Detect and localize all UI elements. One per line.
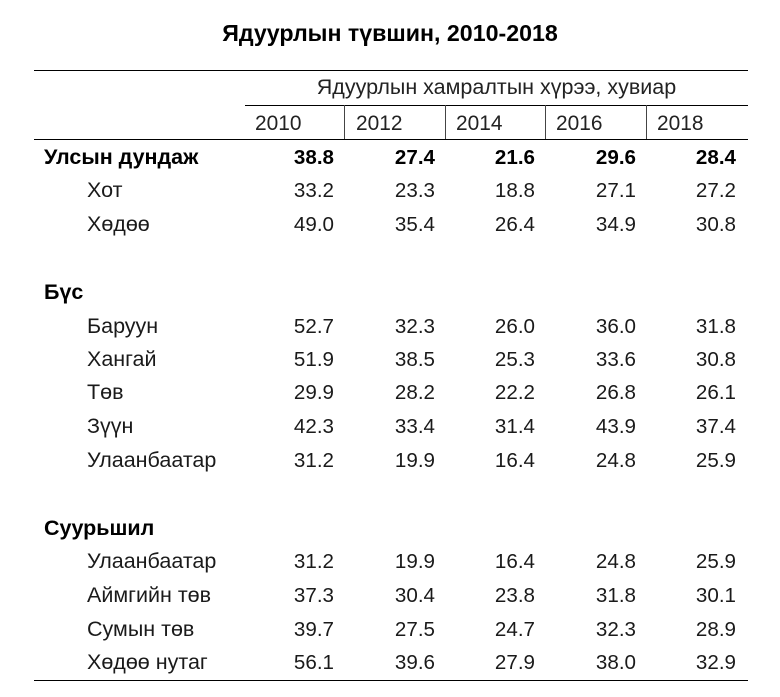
row: urban: 27.1 xyxy=(596,179,636,202)
row: aimag centre: 23.8 xyxy=(495,584,535,607)
row: west: Баруун xyxy=(87,314,158,338)
row: ulaanbaatar (region): 19.9 xyxy=(395,449,435,472)
row: urban: 23.3 xyxy=(395,179,435,202)
section heading: settlement: Суурьшил xyxy=(44,516,154,540)
row: countryside: 27.9 xyxy=(495,651,535,674)
row: national average: 28.4 xyxy=(696,146,737,169)
row: soum centre: 32.3 xyxy=(596,618,636,641)
row: khangai: 51.9 xyxy=(294,348,334,371)
row: urban: 27.2 xyxy=(696,179,736,202)
row: soum centre: 24.7 xyxy=(495,618,535,641)
row: ulaanbaatar (region): 31.2 xyxy=(294,449,334,472)
row: aimag centre: 30.1 xyxy=(696,584,736,607)
row: countryside: Хөдөө нутаг xyxy=(87,650,208,674)
row: east xyxy=(87,414,736,438)
row: rural: 30.8 xyxy=(696,213,736,236)
row: national average: 27.4 xyxy=(395,146,436,169)
row: countryside: 32.9 xyxy=(696,651,736,674)
section heading: region: Бүс xyxy=(44,280,83,304)
row: countryside xyxy=(87,650,736,674)
row: soum centre: 39.7 xyxy=(294,618,334,641)
year headers: 2012 xyxy=(356,112,402,135)
row: rural: 34.9 xyxy=(596,213,636,236)
row: aimag centre: 37.3 xyxy=(294,584,334,607)
row: soum centre: 27.5 xyxy=(395,618,435,641)
row: aimag centre: Аймгийн төв xyxy=(87,583,211,607)
row: west: 31.8 xyxy=(696,315,736,338)
row: aimag centre: 30.4 xyxy=(395,584,435,607)
title: Ядуурлын түвшин, 2010-2018 xyxy=(222,20,558,46)
row: national average: 21.6 xyxy=(495,146,535,169)
row: ulaanbaatar (region): Улаанбаатар xyxy=(87,448,216,472)
row: urban: 18.8 xyxy=(495,179,535,202)
row: east: 37.4 xyxy=(696,415,736,438)
row: rural: 49.0 xyxy=(294,213,334,236)
row: ulaanbaatar (region): 25.9 xyxy=(696,449,736,472)
row: national average: Улсын дундаж xyxy=(44,145,199,169)
row: soum centre xyxy=(87,617,736,641)
row: west: 36.0 xyxy=(596,315,636,338)
row: rural: Хөдөө xyxy=(87,212,150,236)
row: central: 26.8 xyxy=(596,381,636,404)
row: central xyxy=(87,380,736,404)
row: ulaanbaatar (settlement) xyxy=(87,549,736,573)
row: east: 43.9 xyxy=(596,415,636,438)
row: ulaanbaatar (settlement): 16.4 xyxy=(495,550,535,573)
row: countryside: 56.1 xyxy=(294,651,334,674)
row: urban: 33.2 xyxy=(294,179,334,202)
row: ulaanbaatar (region): 24.8 xyxy=(596,449,636,472)
row: west: 32.3 xyxy=(395,315,435,338)
row: ulaanbaatar (settlement): Улаанбаатар xyxy=(87,549,216,573)
row: khangai: 33.6 xyxy=(596,348,636,371)
row: urban xyxy=(87,178,736,202)
row: national average: 38.8 xyxy=(294,146,334,169)
row: ulaanbaatar (region): 16.4 xyxy=(495,449,535,472)
row: ulaanbaatar (settlement): 24.8 xyxy=(596,550,636,573)
row: ulaanbaatar (settlement): 31.2 xyxy=(294,550,334,573)
row: west xyxy=(87,314,736,338)
column heading: poverty headcount, percent: Ядуурлын хамралтын хүрээ, хувиар xyxy=(317,75,676,99)
row: rural xyxy=(87,212,736,236)
row: central: 22.2 xyxy=(495,381,535,404)
row: countryside: 38.0 xyxy=(596,651,636,674)
year headers: 2018 xyxy=(657,112,703,135)
row: central: Төв xyxy=(87,380,124,404)
row: central: 26.1 xyxy=(696,381,736,404)
row: central: 29.9 xyxy=(294,381,334,404)
row: ulaanbaatar (region) xyxy=(87,448,736,472)
row: soum centre: Сумын төв xyxy=(87,617,194,641)
row: khangai: 30.8 xyxy=(696,348,736,371)
row: national average xyxy=(44,145,737,169)
row: east: 42.3 xyxy=(294,415,334,438)
row: ulaanbaatar (settlement): 19.9 xyxy=(395,550,435,573)
year headers: 2014 xyxy=(456,112,502,135)
year headers: 2010 xyxy=(255,112,301,135)
row: ulaanbaatar (settlement): 25.9 xyxy=(696,550,736,573)
row: khangai: Хангай xyxy=(87,347,157,371)
row: west: 52.7 xyxy=(294,315,334,338)
row: khangai xyxy=(87,347,736,371)
row: east: 31.4 xyxy=(495,415,535,438)
row: aimag centre: 31.8 xyxy=(596,584,636,607)
row: east: 33.4 xyxy=(395,415,435,438)
row: urban: Хот xyxy=(87,178,123,202)
row: rural: 26.4 xyxy=(495,213,535,236)
row: west: 26.0 xyxy=(495,315,535,338)
row: rural: 35.4 xyxy=(395,213,435,236)
row: khangai: 25.3 xyxy=(495,348,535,371)
row: khangai: 38.5 xyxy=(395,348,435,371)
row: national average: 29.6 xyxy=(596,146,636,169)
row: east: Зүүн xyxy=(87,414,133,438)
row: soum centre: 28.9 xyxy=(696,618,736,641)
year headers: 2016 xyxy=(556,112,602,135)
year headers xyxy=(255,112,703,135)
row: aimag centre xyxy=(87,583,736,607)
row: central: 28.2 xyxy=(395,381,435,404)
row: countryside: 39.6 xyxy=(395,651,435,674)
